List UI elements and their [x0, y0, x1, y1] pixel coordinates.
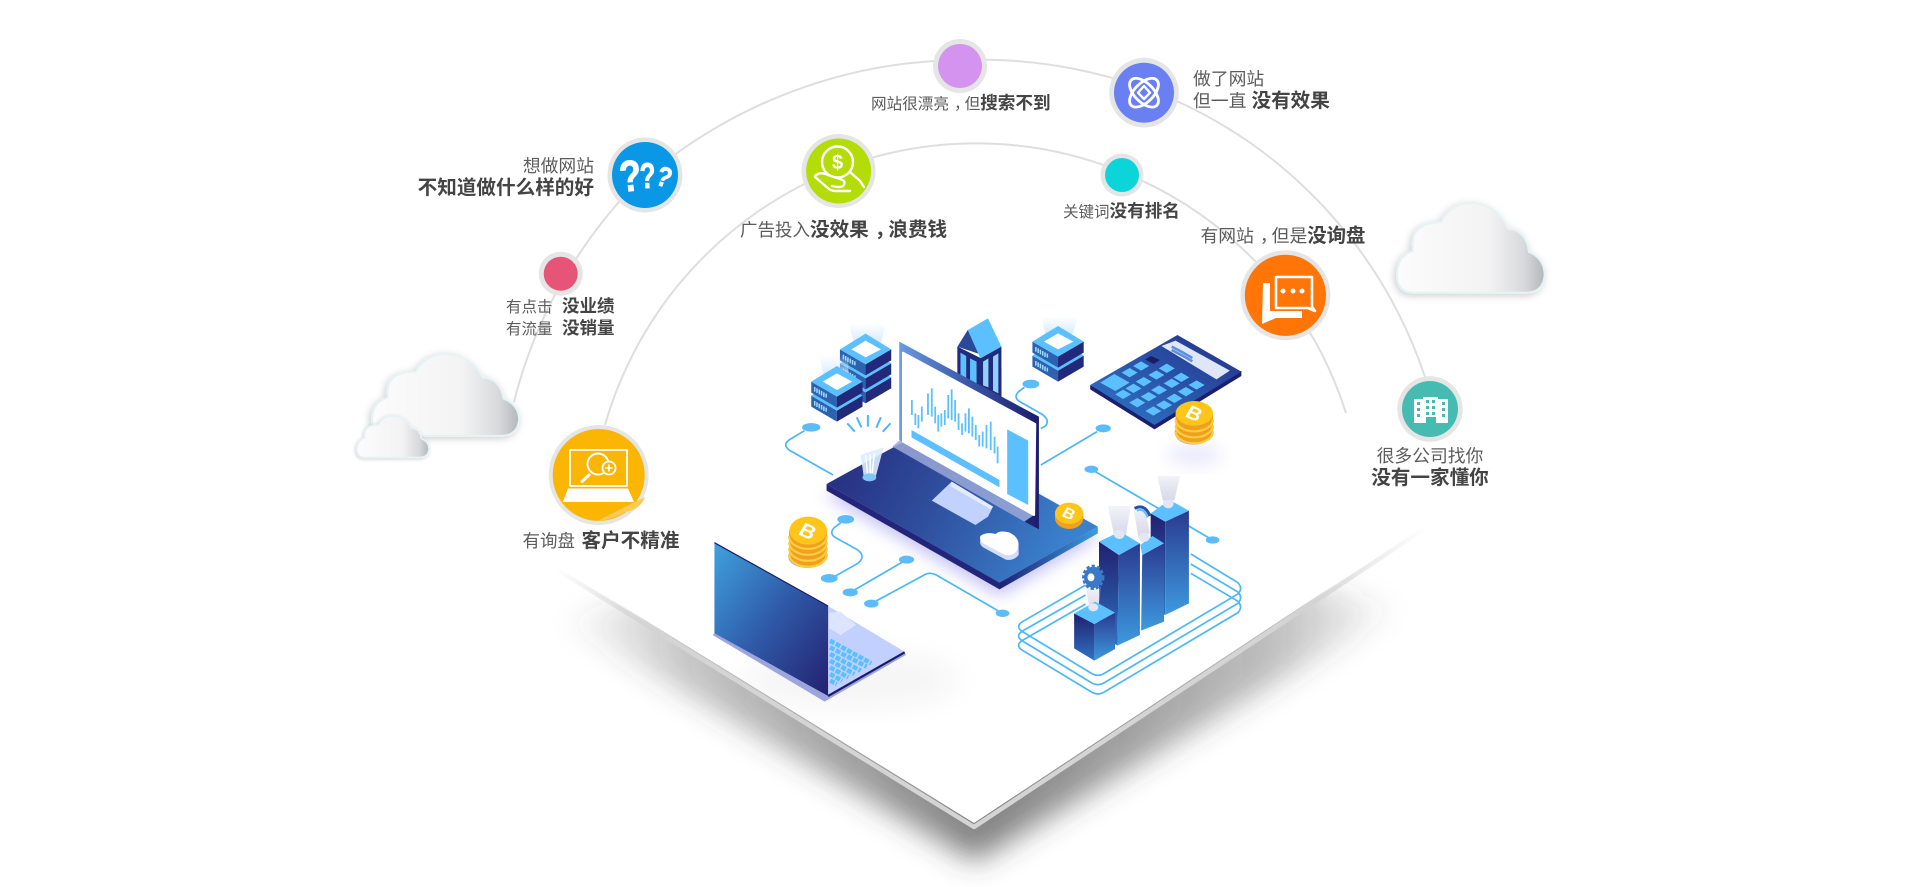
node: green money — [802, 134, 876, 208]
tower wide — [1099, 542, 1119, 646]
label: 很多公司找你 没有一家懂你: 很多公司找你 — [1377, 446, 1484, 466]
gear — [1084, 567, 1102, 588]
label: 网站很漂亮，但搜索不到: 网站很漂亮 ，但搜索不到 — [871, 93, 1051, 113]
node: teal building — [1397, 376, 1463, 442]
small tower — [1086, 587, 1101, 612]
node: purple — [933, 39, 987, 93]
label: 很多公司找你 没有一家懂你 — [1371, 446, 1489, 489]
node: green money: $ — [832, 152, 843, 174]
label: 做了网站 但一直 没有效果: 没有效果 — [1252, 90, 1330, 112]
node: blue question marks: ? — [617, 151, 644, 202]
monitor — [892, 342, 1039, 529]
tower middle — [1141, 543, 1164, 631]
bar towers — [1074, 476, 1189, 661]
coin stack by calculator: B — [1181, 402, 1206, 426]
label: 有询盘 客户不精准: 有询盘 — [522, 531, 575, 551]
cloud: right — [1397, 203, 1545, 293]
label: 很多公司找你 没有一家懂你: 没有一家懂你 — [1371, 466, 1489, 489]
label: 没业绩 没销量: 没销量 — [562, 318, 614, 338]
laptop — [713, 543, 906, 702]
outer arc line — [514, 60, 1425, 402]
node: cyan — [1100, 154, 1144, 196]
node: blue question marks: ? — [652, 159, 677, 195]
label: 做了网站 但一直 没有效果: 做了网站 — [1193, 69, 1264, 89]
label: 想做网站: 不知道做什么样的好 — [418, 176, 594, 199]
coin stack left: B — [795, 519, 820, 545]
calculator — [1090, 335, 1241, 429]
platform shadow — [560, 500, 1400, 862]
main desk slab — [827, 430, 1098, 589]
label: 做了网站 但一直 没有效果: 但一直 — [1193, 91, 1246, 111]
light bulb with rays — [847, 415, 890, 481]
slab glow — [827, 440, 1098, 597]
coin on desk — [1055, 503, 1083, 529]
label: 想做网站: 想做网站 — [523, 156, 594, 176]
server stack right — [1032, 317, 1084, 382]
node: yellow laptop search — [549, 425, 649, 525]
cloud: left small — [357, 416, 429, 457]
label: 有询盘 客户不精准 — [522, 529, 679, 552]
node: indigo atom — [1109, 58, 1179, 128]
screen chart — [912, 388, 998, 463]
label: 关键词没有排名: 关键词没有排名 — [1063, 201, 1180, 221]
coin on desk: B — [1059, 505, 1078, 524]
server stack left front — [811, 355, 863, 422]
coin stack by calculator — [1168, 401, 1221, 467]
node: pink — [539, 252, 583, 296]
isometric platform — [574, 495, 1402, 830]
label: 广告投入没效果，浪费钱: 广告投入没效果 ，浪费钱 — [740, 218, 947, 241]
coin stack left — [788, 517, 827, 568]
node: orange chat — [1240, 250, 1330, 340]
node: blue question marks: ? — [639, 156, 656, 196]
cloud: left large — [372, 354, 519, 436]
label: 没业绩 没销量: 有流量 — [506, 320, 553, 338]
label: 没业绩 没销量: 没业绩 — [562, 296, 615, 316]
wifi — [1135, 507, 1150, 516]
isometric illustration — [713, 317, 1241, 702]
circuit lines — [786, 380, 1241, 694]
label: 做了网站 但一直 没有效果 — [1193, 69, 1330, 112]
tall building — [957, 318, 1001, 400]
label: 没业绩 没销量 — [506, 296, 615, 338]
label: 有询盘 客户不精准: 客户不精准 — [582, 529, 679, 552]
label: 有网站，但是没询盘: 有网站 ，但是没询盘 — [1200, 224, 1365, 247]
label: 没业绩 没销量: 有点击 — [506, 298, 553, 316]
node: blue question marks — [608, 138, 682, 212]
cloud on desk — [980, 531, 1019, 560]
tower right — [1151, 513, 1165, 615]
server stack left rear — [840, 323, 891, 403]
inner arc line — [605, 143, 1346, 425]
